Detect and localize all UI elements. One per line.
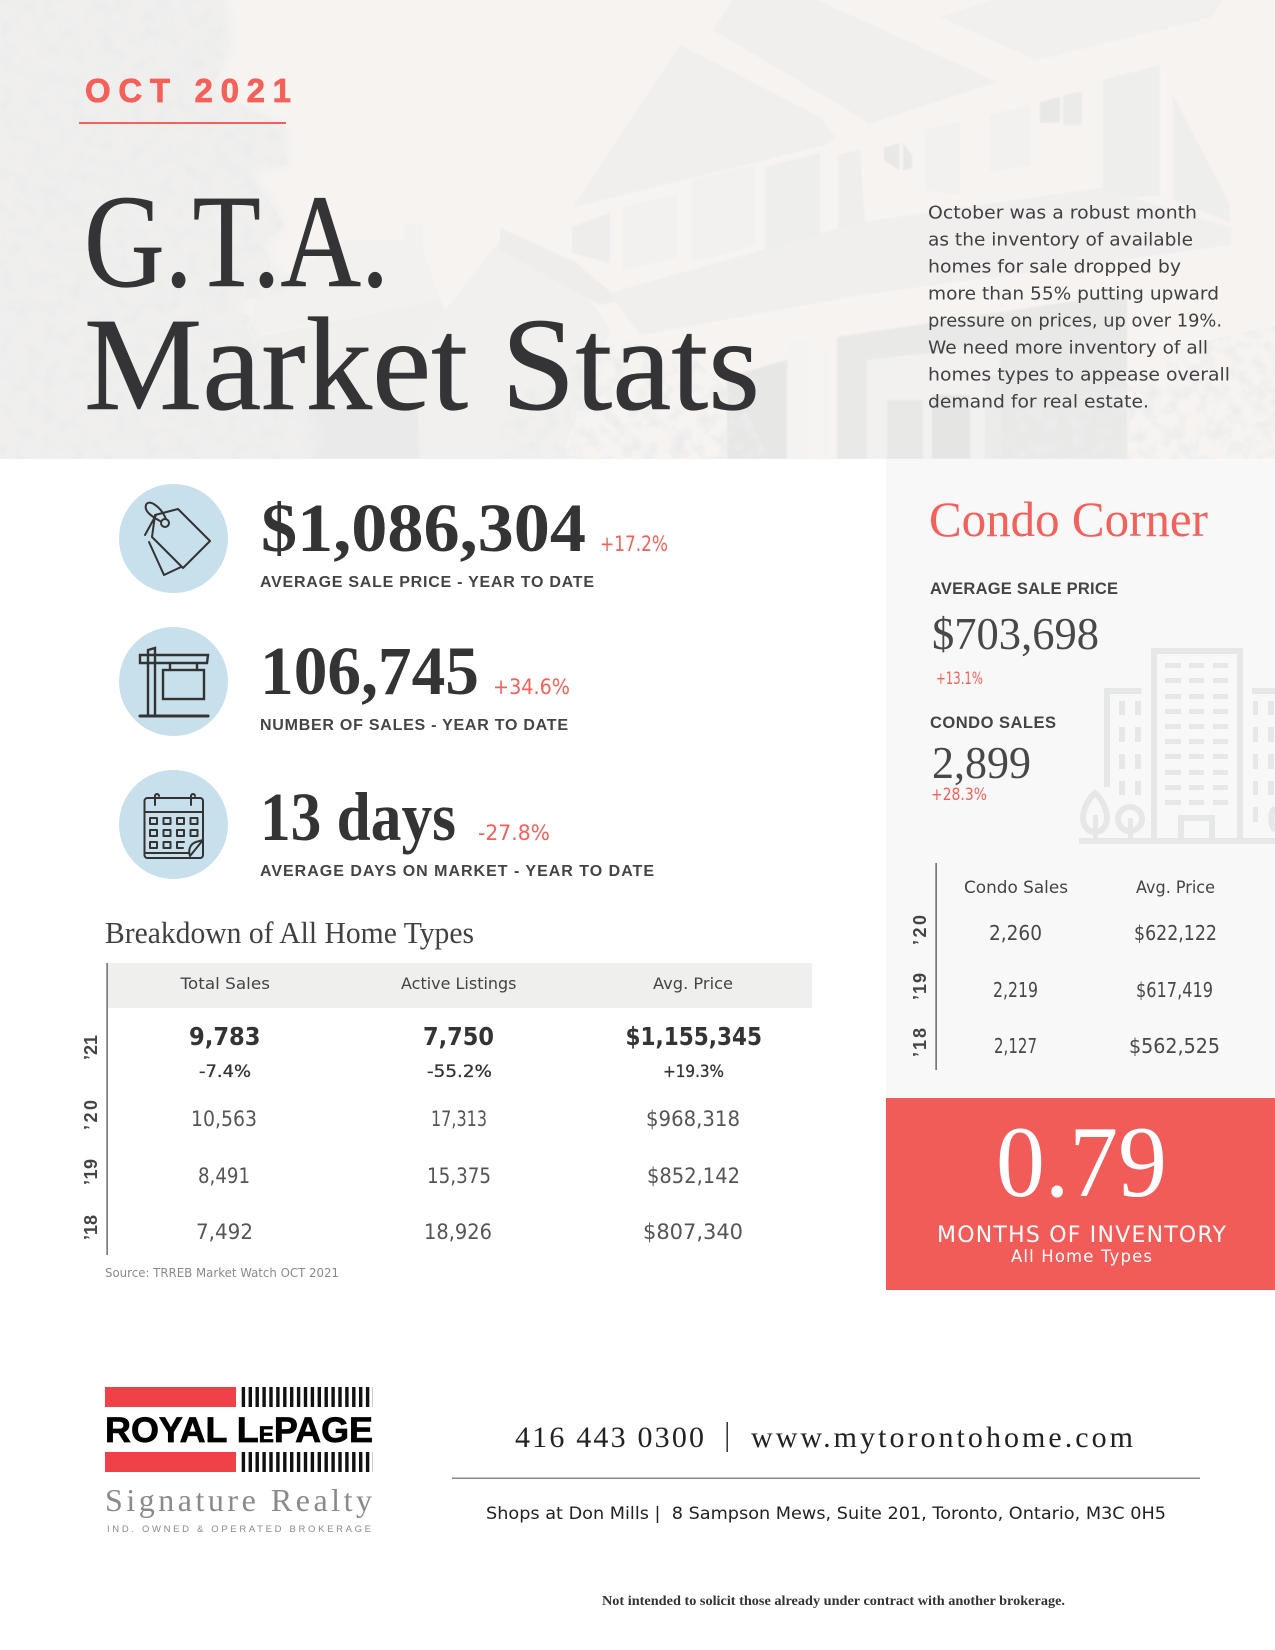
- row 2021: 9,783: [189, 1022, 260, 1051]
- condo row 2020: $622,122: [1134, 921, 1217, 945]
- table column headers: Total Sales: [179, 974, 270, 993]
- title: Market Stats: [84, 290, 760, 438]
- row 2018: 7,492: [196, 1220, 253, 1244]
- stat: average sale price: [119, 484, 668, 593]
- change: +34.6%: [493, 675, 570, 699]
- table column headers: [179, 974, 733, 993]
- address: Shops at Don Mills | 8 Sampson Mews, Suite 201, Toronto, Ontario, M3C 0H5: [486, 1504, 1166, 1523]
- row 2019: $852,142: [647, 1164, 740, 1188]
- condo table headers: [964, 878, 1215, 897]
- inventory value: 0.79: [996, 1106, 1167, 1219]
- logo: royal lepage signature realty: IND. OWNED & OPERATED BROKERAGE: [107, 1524, 371, 1535]
- condo sales change: +28.3%: [931, 785, 987, 805]
- header photo: faded house: [0, 0, 1275, 480]
- stat: days on market: [119, 770, 654, 880]
- condo year labels: ’20: [910, 915, 930, 945]
- heading: condo corner: Condo Corner: [929, 491, 1208, 547]
- logo: royal lepage signature realty: [105, 1387, 373, 1535]
- table: condo history: [910, 863, 1220, 1070]
- row 2018: [196, 1220, 743, 1244]
- title: [84, 167, 760, 438]
- panel: months of inventory: [886, 1098, 1275, 1290]
- intro paragraph: homes for sale dropped by: [928, 256, 1181, 278]
- value: 13 days: [260, 779, 456, 855]
- condo average sale price change: +13.1%: [936, 669, 983, 688]
- heading: breakdown table: Breakdown of All Home Types: [105, 915, 474, 950]
- icon: calendar: [119, 770, 228, 879]
- condo sales label: CONDO SALES: [930, 714, 1056, 732]
- inventory label: MONTHS OF INVENTORY: [937, 1223, 1227, 1248]
- contact: phone and website: www.mytorontohome.com: [751, 1421, 1133, 1454]
- inventory sub label: All Home Types: [1011, 1247, 1152, 1266]
- row 2021: $1,155,345: [626, 1022, 762, 1051]
- title: G.T.A.: [84, 167, 389, 315]
- condo row 2018: 2,127: [994, 1034, 1037, 1058]
- intro paragraph: pressure on prices, up over 19%.: [928, 310, 1222, 332]
- icon: condo buildings watermark: [1079, 651, 1275, 844]
- row 2021: 7,750: [423, 1022, 494, 1051]
- source note: Source: TRREB Market Watch OCT 2021: [105, 1265, 339, 1280]
- intro paragraph: We need more inventory of all: [928, 338, 1208, 358]
- panel: condo corner background: [886, 459, 1275, 1097]
- condo year labels: ’18: [910, 1028, 930, 1057]
- condo row 2019: $617,419: [1136, 978, 1213, 1002]
- condo row 2019: 2,219: [993, 978, 1038, 1002]
- row 2018: $807,340: [643, 1220, 743, 1244]
- table header band: [108, 963, 812, 1008]
- row 2019: 8,491: [198, 1164, 250, 1188]
- row 2021: -7.4%: [199, 1062, 251, 1082]
- condo table headers: Avg. Price: [1136, 878, 1215, 897]
- table year labels: ’21: [81, 1035, 101, 1060]
- label: AVERAGE SALE PRICE - YEAR TO DATE: [260, 574, 594, 591]
- row 2019: [198, 1164, 740, 1188]
- table column headers: Active Listings: [401, 974, 516, 993]
- table: breakdown of all home types: [81, 963, 812, 1255]
- condo row 2018: [994, 1034, 1220, 1058]
- intro paragraph: [928, 202, 1230, 412]
- divider: [452, 1478, 1200, 1479]
- row 2018: 18,926: [424, 1220, 492, 1244]
- row 2021: -55.2%: [427, 1062, 492, 1082]
- change: -27.8%: [478, 821, 550, 845]
- table axis line: [106, 963, 108, 1255]
- condo row 2020: 2,260: [989, 921, 1042, 945]
- condo year labels: ’19: [910, 973, 930, 1000]
- intro paragraph: more than 55% putting upward: [928, 284, 1219, 304]
- row 2021: [189, 1022, 762, 1082]
- condo average sale price value: $703,698: [932, 608, 1099, 659]
- intro paragraph: demand for real estate.: [928, 392, 1149, 412]
- intro paragraph: as the inventory of available: [928, 230, 1193, 250]
- icon: price tags: [119, 484, 228, 593]
- condo average sale price label: AVERAGE SALE PRICE: [930, 580, 1118, 598]
- date heading: OCT 2021: [85, 72, 291, 109]
- intro paragraph: October was a robust month: [928, 202, 1197, 224]
- condo row 2020: [989, 921, 1217, 945]
- condo sales value: 2,899: [932, 737, 1031, 788]
- row 2021: +19.3%: [663, 1062, 724, 1082]
- date underline: [79, 122, 286, 124]
- table year labels: [81, 1035, 101, 1240]
- condo table headers: Condo Sales: [964, 878, 1068, 897]
- contact: phone and website: 416 443 0300: [515, 1421, 704, 1454]
- change: +17.2%: [600, 532, 668, 556]
- table year labels: ’18: [81, 1215, 101, 1240]
- icon: for sale sign: [119, 627, 228, 736]
- row 2020: 10,563: [191, 1107, 257, 1131]
- label: AVERAGE DAYS ON MARKET - YEAR TO DATE: [260, 863, 654, 880]
- value: 106,745: [260, 633, 479, 709]
- stat: number of sales: [119, 627, 570, 736]
- logo: royal lepage signature realty: ROYAL LEPAGE: [105, 1411, 373, 1450]
- table year labels: ’20: [81, 1100, 101, 1130]
- contact: phone and website: [515, 1421, 1133, 1454]
- condo year labels: [910, 915, 930, 1057]
- condo row 2018: $562,525: [1129, 1034, 1220, 1058]
- row 2020: [191, 1107, 740, 1131]
- disclaimer: Not intended to solicit those already under contract with another brokerage.: [602, 1593, 1065, 1608]
- value: $1,086,304: [261, 490, 586, 566]
- table year labels: ’19: [81, 1159, 101, 1185]
- logo: royal lepage signature realty: Signature Realty: [105, 1482, 372, 1518]
- condo row 2019: [993, 978, 1213, 1002]
- condo table axis line: [936, 863, 937, 1070]
- intro paragraph: homes types to appease overall: [928, 364, 1230, 386]
- row 2020: 17,313: [431, 1107, 487, 1131]
- table column headers: Avg. Price: [653, 974, 733, 993]
- row 2019: 15,375: [427, 1164, 491, 1188]
- label: NUMBER OF SALES - YEAR TO DATE: [260, 717, 568, 734]
- row 2020: $968,318: [646, 1107, 740, 1131]
